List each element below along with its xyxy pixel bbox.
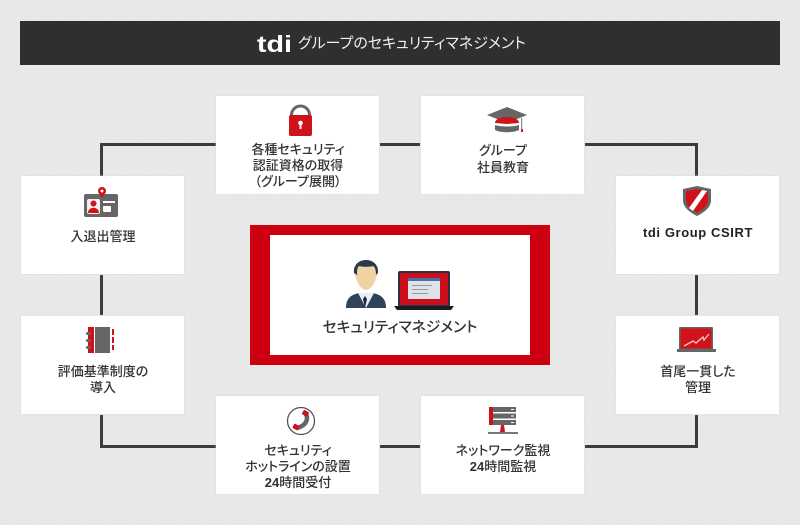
panel: 評価基準制度の導入: [21, 316, 184, 414]
icon: graduation cap: [487, 107, 527, 132]
panel: 各種セキュリティ認証資格の取得: [216, 96, 379, 194]
label: 24時間受付: [265, 475, 331, 490]
label: セキュリティマネジメント: [323, 320, 477, 336]
label: 管理: [685, 380, 711, 395]
label: グループ: [479, 143, 527, 158]
icon: phone: [286, 406, 316, 436]
panel: ネットワーク監視: [421, 396, 584, 494]
panel: 入退出管理: [21, 176, 184, 274]
icon: shield: [683, 186, 711, 216]
label: [251, 142, 345, 189]
panel: center セキュリティマネジメント: [250, 225, 550, 365]
label: 認証資格の取得: [253, 158, 343, 173]
icon: businessman: [346, 260, 386, 308]
title bar: [20, 21, 780, 65]
label: 入退出管理: [70, 229, 136, 244]
label: [58, 364, 148, 395]
label: （グループ展開）: [255, 174, 341, 189]
logo: tdi: tdi: [257, 31, 292, 57]
label: 各種セキュリティ: [251, 142, 345, 157]
label: 首尾一貫した: [660, 364, 736, 379]
panel: グループ社員教育: [421, 96, 584, 194]
label: 評価基準制度の: [58, 364, 148, 379]
icon: laptop with chart: [677, 327, 716, 352]
label: [477, 143, 529, 175]
label: [660, 364, 736, 395]
label: 導入: [90, 380, 116, 395]
label: [245, 443, 351, 490]
label: [456, 443, 550, 474]
icon: server rack: [488, 407, 518, 434]
label: ネットワーク監視: [456, 443, 550, 458]
panel: セキュリティホットライン: [216, 396, 379, 494]
panel: 首尾一貫した管理: [616, 316, 779, 414]
icon: laptop: [394, 271, 454, 310]
label: 社員教育: [477, 160, 529, 175]
label: ホットラインの設置: [245, 459, 351, 474]
inner white panel: [270, 235, 530, 355]
title text: グループのセキュリティマネジメント: [298, 35, 526, 52]
icon: ID badge: [84, 187, 118, 217]
label: セキュリティ: [264, 443, 332, 458]
icon: notebook: [86, 327, 114, 353]
connector lines: [100, 108, 698, 448]
label: tdi Group CSIRT: [643, 225, 753, 240]
label: 24時間監視: [470, 459, 536, 474]
panel: tdi Group CSIRT: [616, 176, 779, 274]
icon: padlock: [289, 104, 312, 136]
